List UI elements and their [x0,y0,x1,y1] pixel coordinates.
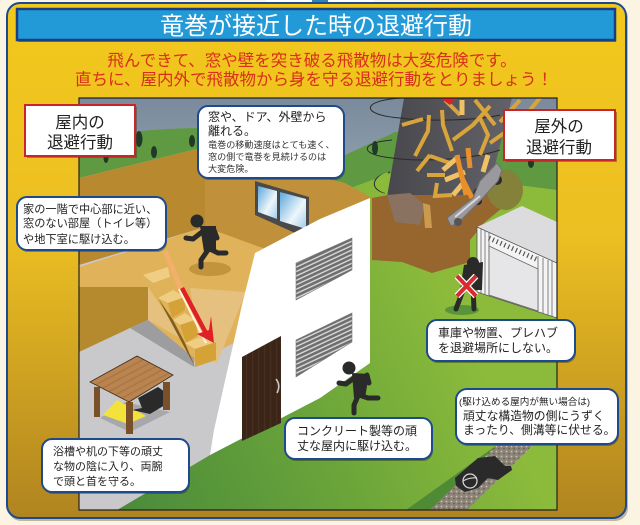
arrow [165,251,214,343]
red warning text [75,51,553,89]
storage shed [477,206,557,318]
label: outdoor action [504,110,617,162]
callout: crouch in ditch: 頑丈な構造物の側にうずく [463,409,605,423]
table with person sheltering [90,356,173,434]
callout: stay away from windows: 竜巻の移動速度はとても速く、 [208,139,335,150]
label: outdoor action: 退避行動 [526,138,592,157]
callout: do not use garage: を退避場所にしない。 [438,341,558,355]
person by shed with X mark [445,257,483,315]
person running upstairs [186,214,231,276]
callout: first floor centre room [17,197,167,252]
overturned car [447,163,502,226]
hills [79,128,557,260]
callout: run into concrete building: 丈な屋内に駆け込む。 [297,439,417,453]
callout: shelter under bathtub or desk: 浴槽や机の下等の頑丈 [53,444,163,458]
red warning text: 直ちに、屋内外で飛散物から身を守る退避行動をとりましょう！ [75,70,553,89]
flying debris [402,98,540,198]
label: indoor action: 屋内の [55,113,105,132]
title bar [17,9,616,42]
scene border [79,98,557,510]
callout: stay away from windows: 窓や、ドア、外壁から [208,110,326,124]
dirt cloud [372,170,523,273]
callout: crouch in ditch: まったり、側溝等に伏せる。 [463,423,615,437]
callout: first floor centre room: 家の一階で中心部に近い、 [23,202,157,216]
ground grass [117,170,557,510]
window [255,181,309,233]
callout: shelter under bathtub or desk [42,439,190,494]
callout: run into concrete building: コンクリート製等の頑 [297,424,417,438]
label: outdoor action: 屋外の [534,117,584,136]
callout: run into concrete building [285,418,433,461]
vent upper [296,238,352,300]
callout: first floor centre room: や地下室に駆け込む。 [23,233,135,246]
callout: do not use garage [427,320,576,363]
illustration scene [79,98,557,510]
callout: stay away from windows: 窓の側で竜巻を見続けるのは [208,151,326,162]
ditch [406,445,533,510]
title bar: 竜巻が接近した時の退避行動 [160,13,472,40]
label: indoor action [25,105,137,158]
tornado [367,98,512,197]
sky [79,98,557,510]
callout: crouch in ditch [456,389,619,446]
callout: shelter under bathtub or desk: で頭と首を守る。 [53,474,141,488]
person lying in ditch [455,456,512,492]
stairs [143,267,216,367]
top tab [266,0,374,3]
door handle [276,379,279,393]
callout: stay away from windows: 離れる。 [208,124,256,138]
red warning text: 飛んできて、窓や壁を突き破る飛散物は大変危険です。 [107,51,517,70]
callout: first floor centre room: 窓のない部屋（トイレ等） [23,216,157,230]
callout: stay away from windows: 大変危険。 [208,163,253,174]
callout: do not use garage: 車庫や物置、プレハブ [438,325,558,340]
vent lower [296,313,352,377]
callout: shelter under bathtub or desk: な物の陰に入り、両腕 [53,459,163,473]
label: indoor action: 退避行動 [47,133,113,152]
door [242,336,281,441]
person running outside [339,362,378,413]
callout: crouch in ditch: (駆け込める屋内が無い場合は) [459,396,590,408]
room [79,147,372,510]
building wall [210,198,370,455]
callout: stay away from windows [198,106,345,180]
